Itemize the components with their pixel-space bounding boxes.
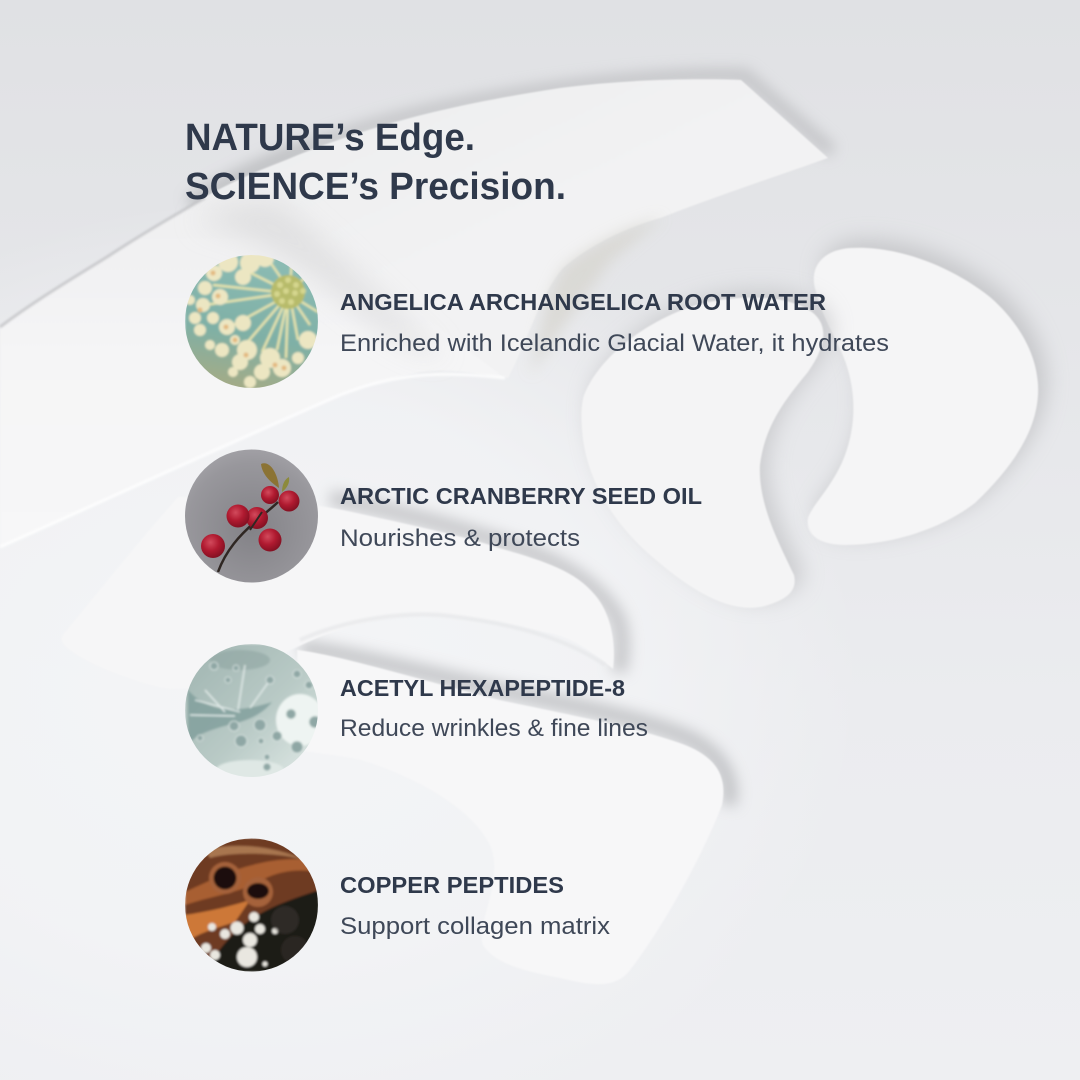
icon: arctic cranberry photo (185, 449, 319, 583)
title: NATURE’s Edge. (185, 117, 475, 159)
patch: right under-eye pad (808, 240, 1046, 545)
title (185, 117, 566, 208)
text: cranberry benefit: Nourishes & protects (340, 525, 580, 552)
patch: large left strip (0, 192, 505, 547)
patch: top forehead strip (190, 76, 832, 378)
patch: upper brow strip (62, 497, 622, 689)
text: copper benefit: Support collagen matrix (340, 913, 610, 940)
patch: left under-eye pad (581, 290, 831, 608)
heading: copper peptides: COPPER PEPTIDES (340, 872, 564, 898)
icon: water droplets photo (185, 644, 324, 780)
text: acetyl benefit: Reduce wrinkles & fine lines (340, 715, 648, 742)
heading: angelica: ANGELICA ARCHANGELICA ROOT WATER (340, 289, 826, 315)
patch: lower forehead strip (297, 648, 729, 984)
icon: copper bubbles photo (185, 838, 319, 972)
icon: angelica flower photo (185, 249, 319, 389)
heading: cranberry: ARCTIC CRANBERRY SEED OIL (340, 483, 702, 509)
heading: acetyl hexapeptide: ACETYL HEXAPEPTIDE-8 (340, 675, 625, 701)
text: angelica benefit: Enriched with Icelandic Glacial Water, it hydrates (340, 330, 889, 357)
title: SCIENCE’s Precision. (185, 166, 566, 208)
